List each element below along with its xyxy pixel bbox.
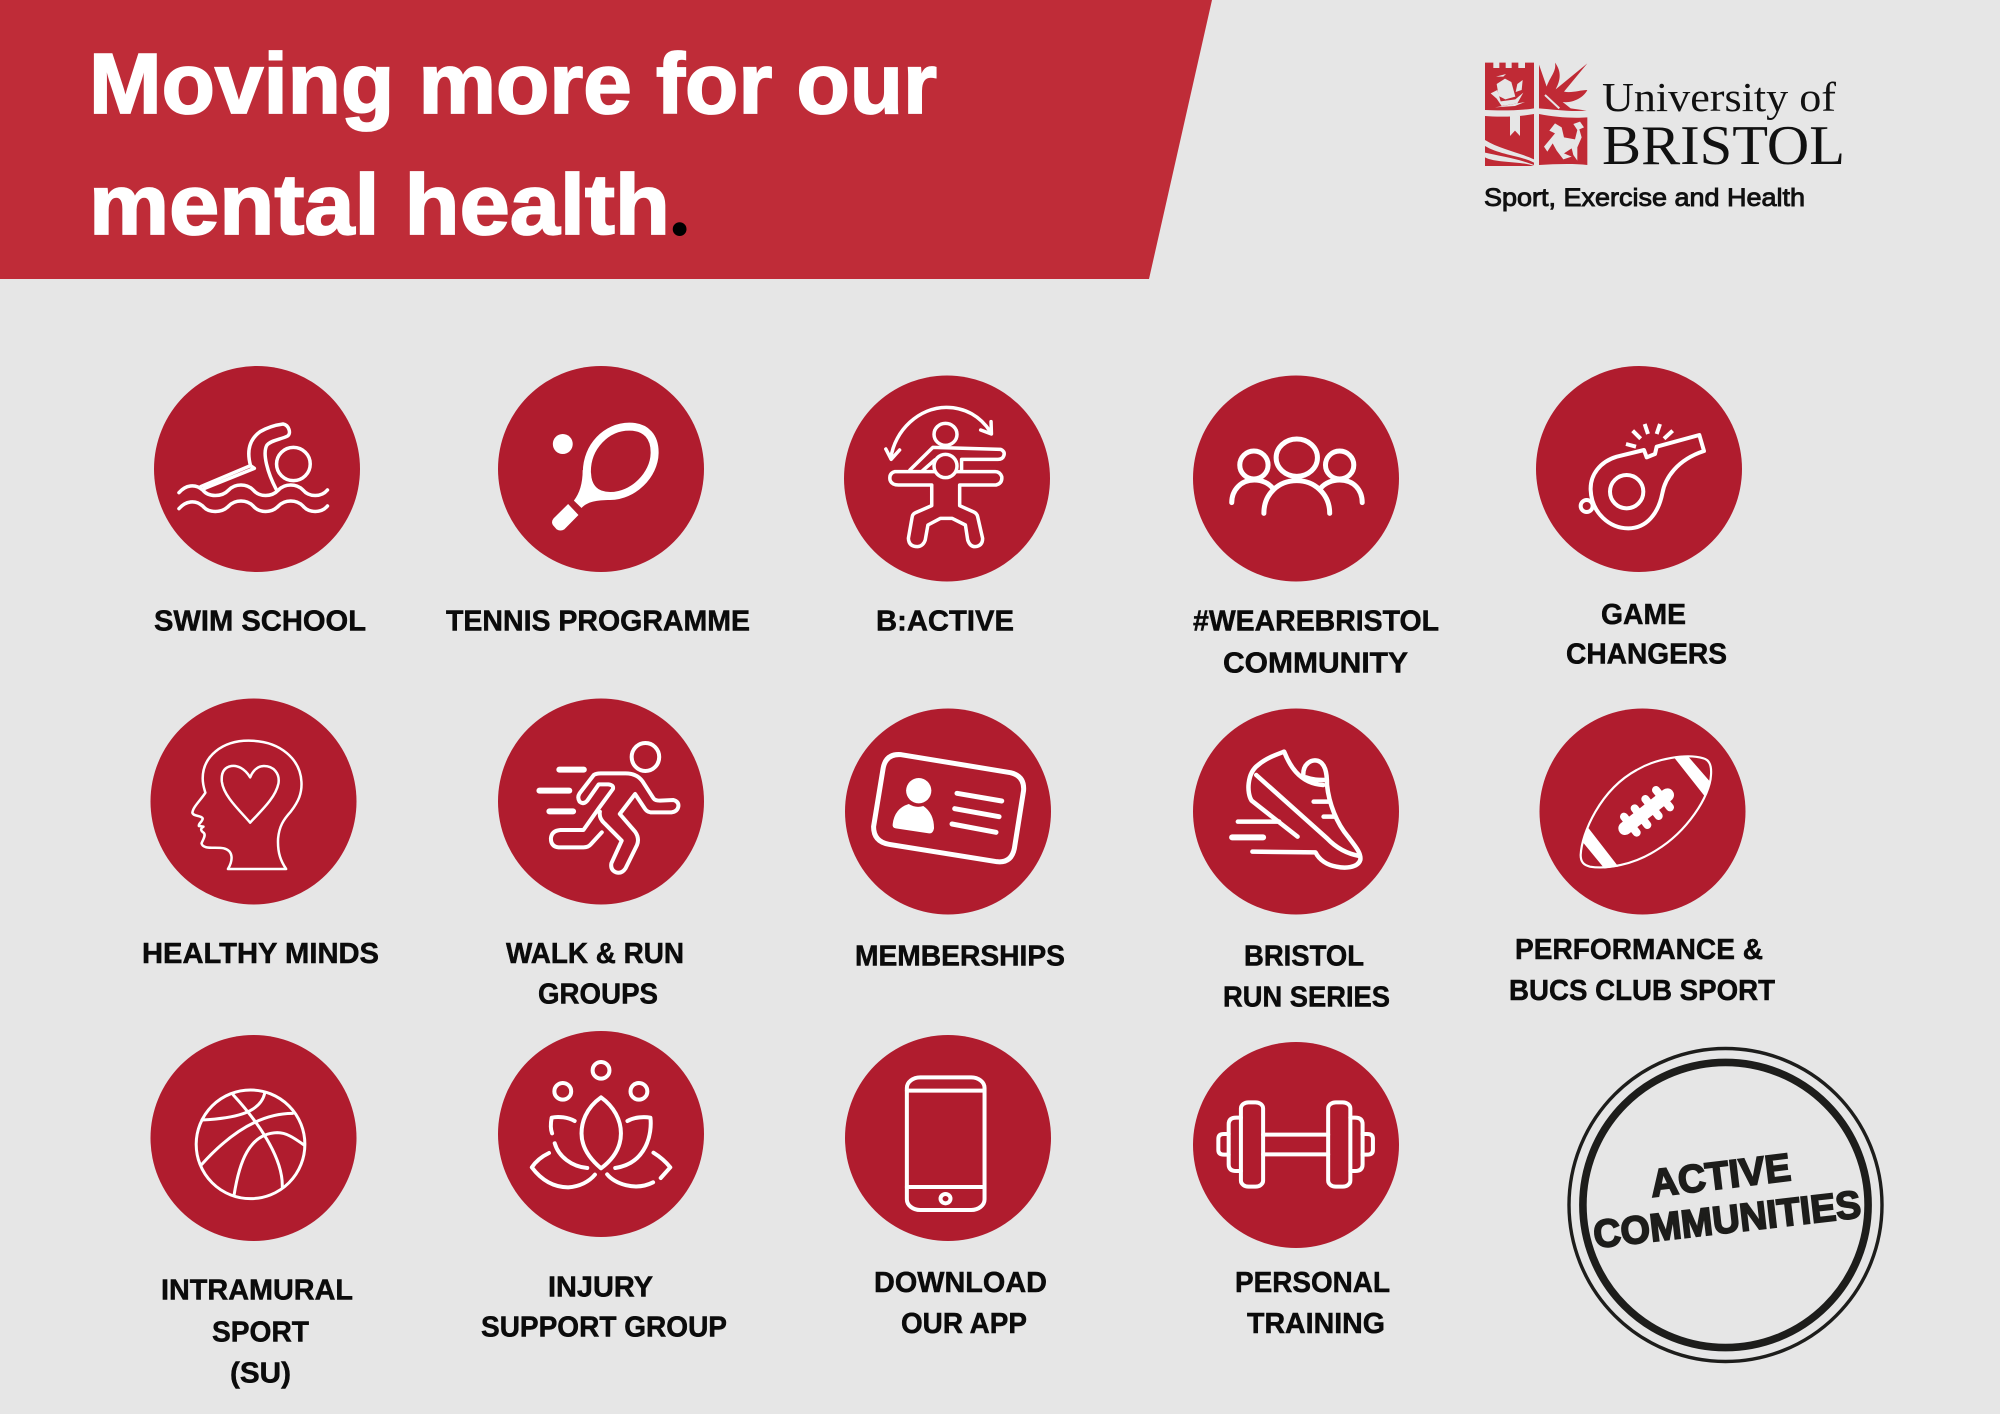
label: SUPPORT GROUP (481, 1312, 727, 1344)
label: RUN SERIES (1223, 982, 1390, 1014)
label: PERSONAL (1235, 1267, 1390, 1299)
label (1235, 1267, 1390, 1340)
item: injury support group (481, 1031, 727, 1344)
icon: swimmer (179, 424, 327, 511)
item: download our app (845, 1035, 1051, 1340)
item: tennis programme (446, 366, 750, 638)
item: personal training (1193, 1042, 1399, 1340)
item: game changers (1536, 366, 1742, 670)
university logo (1484, 63, 1845, 212)
icon: group of people (1232, 439, 1362, 513)
label (1193, 606, 1439, 680)
badge circle (1193, 376, 1399, 582)
logo subtitle: Sport, Exercise and Health (1484, 184, 1805, 212)
item: swim school (154, 366, 366, 638)
icon: rugby ball (1581, 756, 1711, 868)
stamp: active communities (1569, 1048, 1882, 1362)
item: healthy minds (142, 698, 379, 970)
logo wordmark: BRISTOL (1602, 115, 1845, 177)
badge circle (1193, 708, 1399, 914)
item: memberships (845, 708, 1065, 972)
badge circle (498, 366, 704, 572)
title (89, 37, 937, 254)
label (874, 1267, 1047, 1340)
title: . (669, 160, 690, 254)
stamp rings (1569, 1048, 1882, 1362)
header banner (0, 0, 1212, 279)
label: BRISTOL (1244, 940, 1364, 972)
item: #wearebristol community (1193, 376, 1439, 680)
badge circle (844, 376, 1050, 582)
label (481, 1272, 727, 1344)
label: TENNIS PROGRAMME (446, 606, 750, 638)
label: GAME (1601, 599, 1686, 631)
badge circle (150, 698, 356, 904)
logo wordmark (1602, 74, 1845, 177)
stamp text (1591, 1146, 1863, 1257)
icon: university crest (1485, 63, 1587, 166)
label: COMMUNITY (1223, 648, 1408, 680)
icon: lotus (532, 1062, 670, 1187)
icon: figure with rotation arrow (886, 407, 1004, 547)
icon: tennis racket (552, 427, 655, 530)
label (161, 1274, 353, 1390)
icon: smartphone (907, 1077, 985, 1210)
item: intramural sport (150, 1035, 356, 1390)
label (506, 938, 684, 1010)
icon: head with heart (192, 741, 302, 869)
label (1223, 940, 1390, 1014)
label: CHANGERS (1566, 638, 1727, 670)
label: B:ACTIVE (876, 606, 1014, 638)
stamp text: COMMUNITIES (1591, 1183, 1863, 1257)
label: #WEAREBRISTOL (1193, 606, 1439, 638)
label: BUCS CLUB SPORT (1509, 975, 1775, 1007)
stamp text: ACTIVE (1648, 1146, 1793, 1206)
title: mental health (89, 158, 670, 253)
label (1509, 934, 1775, 1007)
label: GROUPS (538, 978, 658, 1010)
badge circle (845, 708, 1051, 914)
item: performance and bucs club sport (1509, 708, 1775, 1007)
label: DOWNLOAD (874, 1267, 1047, 1299)
label: SPORT (212, 1316, 309, 1348)
badge circle (498, 1031, 704, 1237)
badge circle (1540, 708, 1746, 914)
badge circle (845, 1035, 1051, 1241)
item: b:active (844, 376, 1050, 638)
label: OUR APP (901, 1308, 1027, 1340)
label: (SU) (230, 1358, 291, 1390)
title: Moving more for our (89, 37, 937, 132)
badge circle (1536, 366, 1742, 572)
icon: runner (539, 743, 678, 873)
icon: running shoe (1232, 752, 1360, 868)
badge circle (1193, 1042, 1399, 1248)
label: INJURY (548, 1272, 653, 1304)
label: INTRAMURAL (161, 1274, 353, 1306)
item: bristol run series (1193, 708, 1399, 1014)
label: SWIM SCHOOL (154, 606, 366, 638)
icon: dumbbell (1218, 1102, 1373, 1187)
label: HEALTHY MINDS (142, 938, 379, 970)
logo wordmark: University of (1602, 74, 1836, 120)
label: PERFORMANCE & (1515, 934, 1763, 966)
icon: basketball (196, 1090, 305, 1199)
badge circle (154, 366, 360, 572)
badge circle (150, 1035, 356, 1241)
badge circle (498, 698, 704, 904)
item: walk and run groups (498, 698, 704, 1010)
icon: membership card (874, 755, 1024, 862)
label: WALK & RUN (506, 938, 684, 970)
icon: whistle (1581, 424, 1704, 528)
label: TRAINING (1247, 1308, 1385, 1340)
label (1566, 599, 1727, 670)
label: MEMBERSHIPS (855, 940, 1065, 972)
